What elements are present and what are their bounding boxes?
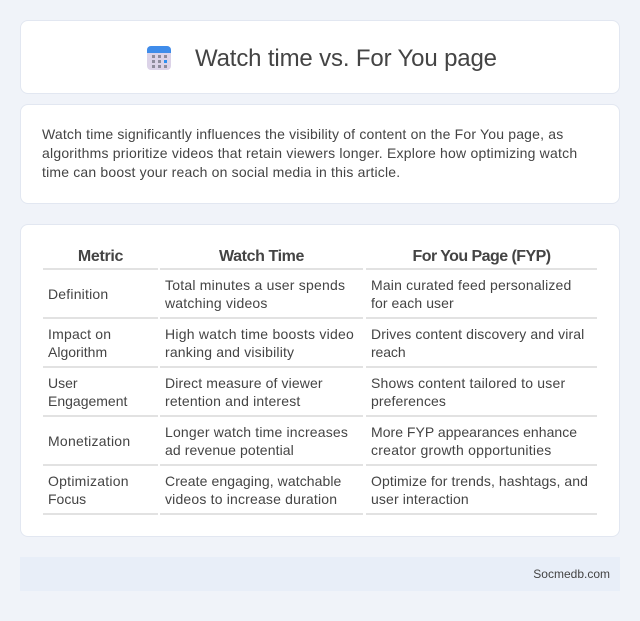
row: optimization focus: Focus (48, 491, 86, 507)
panel: title (20, 20, 620, 94)
row: monetization: Longer watch time increases (165, 424, 348, 440)
icon: calendar (147, 46, 171, 70)
table header: For You Page (FYP) (413, 248, 550, 265)
row: user engagement: Direct measure of viewer (165, 375, 323, 391)
table header (78, 248, 550, 265)
row: impact on algorithm: Drives content discovery and viral (371, 326, 584, 342)
row: definition: for each user (371, 295, 454, 311)
table header: Metric (78, 248, 123, 265)
row: impact on algorithm: Impact on (48, 326, 111, 342)
row: monetization (48, 424, 577, 458)
row: optimization focus: Optimize for trends, hashtags, and (371, 473, 588, 489)
row: definition: Main curated feed personalized (371, 277, 571, 293)
row: definition (48, 277, 571, 311)
row: monetization: More FYP appearances enhance (371, 424, 577, 440)
row: definition: watching videos (165, 295, 268, 311)
row: optimization focus: Create engaging, watchable (165, 473, 341, 489)
row: optimization focus: Optimization (48, 473, 129, 489)
row: definition: Total minutes a user spends (165, 277, 345, 293)
row: user engagement: Shows content tailored to user (371, 375, 565, 391)
heading: Watch time vs. For You page (195, 45, 497, 72)
row: impact on algorithm: High watch time boosts video (165, 326, 354, 342)
row: user engagement: preferences (371, 393, 446, 409)
row: optimization focus: user interaction (371, 491, 469, 507)
row: user engagement (48, 375, 565, 409)
intro paragraph (42, 126, 577, 180)
footer source text: Socmedb.com (533, 567, 610, 581)
row: user engagement: Engagement (48, 393, 127, 409)
row: monetization: creator growth opportunities (371, 442, 552, 458)
intro paragraph: time can boost your reach on social media in this article. (42, 164, 400, 180)
panel: comparison table (20, 224, 620, 537)
table header: Watch Time (219, 248, 304, 265)
panel: intro text (20, 104, 620, 204)
intro paragraph: algorithms prioritize videos that retain viewers longer. Explore how optimizing watch (42, 145, 577, 161)
row: user engagement: User (48, 375, 78, 391)
intro paragraph: Watch time significantly influences the visibility of content on the For You page, as (42, 126, 563, 142)
row: optimization focus (48, 473, 588, 507)
row: user engagement: retention and interest (165, 393, 300, 409)
row: impact on algorithm (48, 326, 584, 360)
row: definition: Definition (48, 286, 108, 302)
row: monetization: ad revenue potential (165, 442, 294, 458)
row: optimization focus: videos to increase duration (165, 491, 337, 507)
footer bar (20, 557, 620, 591)
row: impact on algorithm: Algorithm (48, 344, 107, 360)
row: impact on algorithm: ranking and visibility (165, 344, 294, 360)
row: monetization: Monetization (48, 433, 130, 449)
row: impact on algorithm: reach (371, 344, 406, 360)
